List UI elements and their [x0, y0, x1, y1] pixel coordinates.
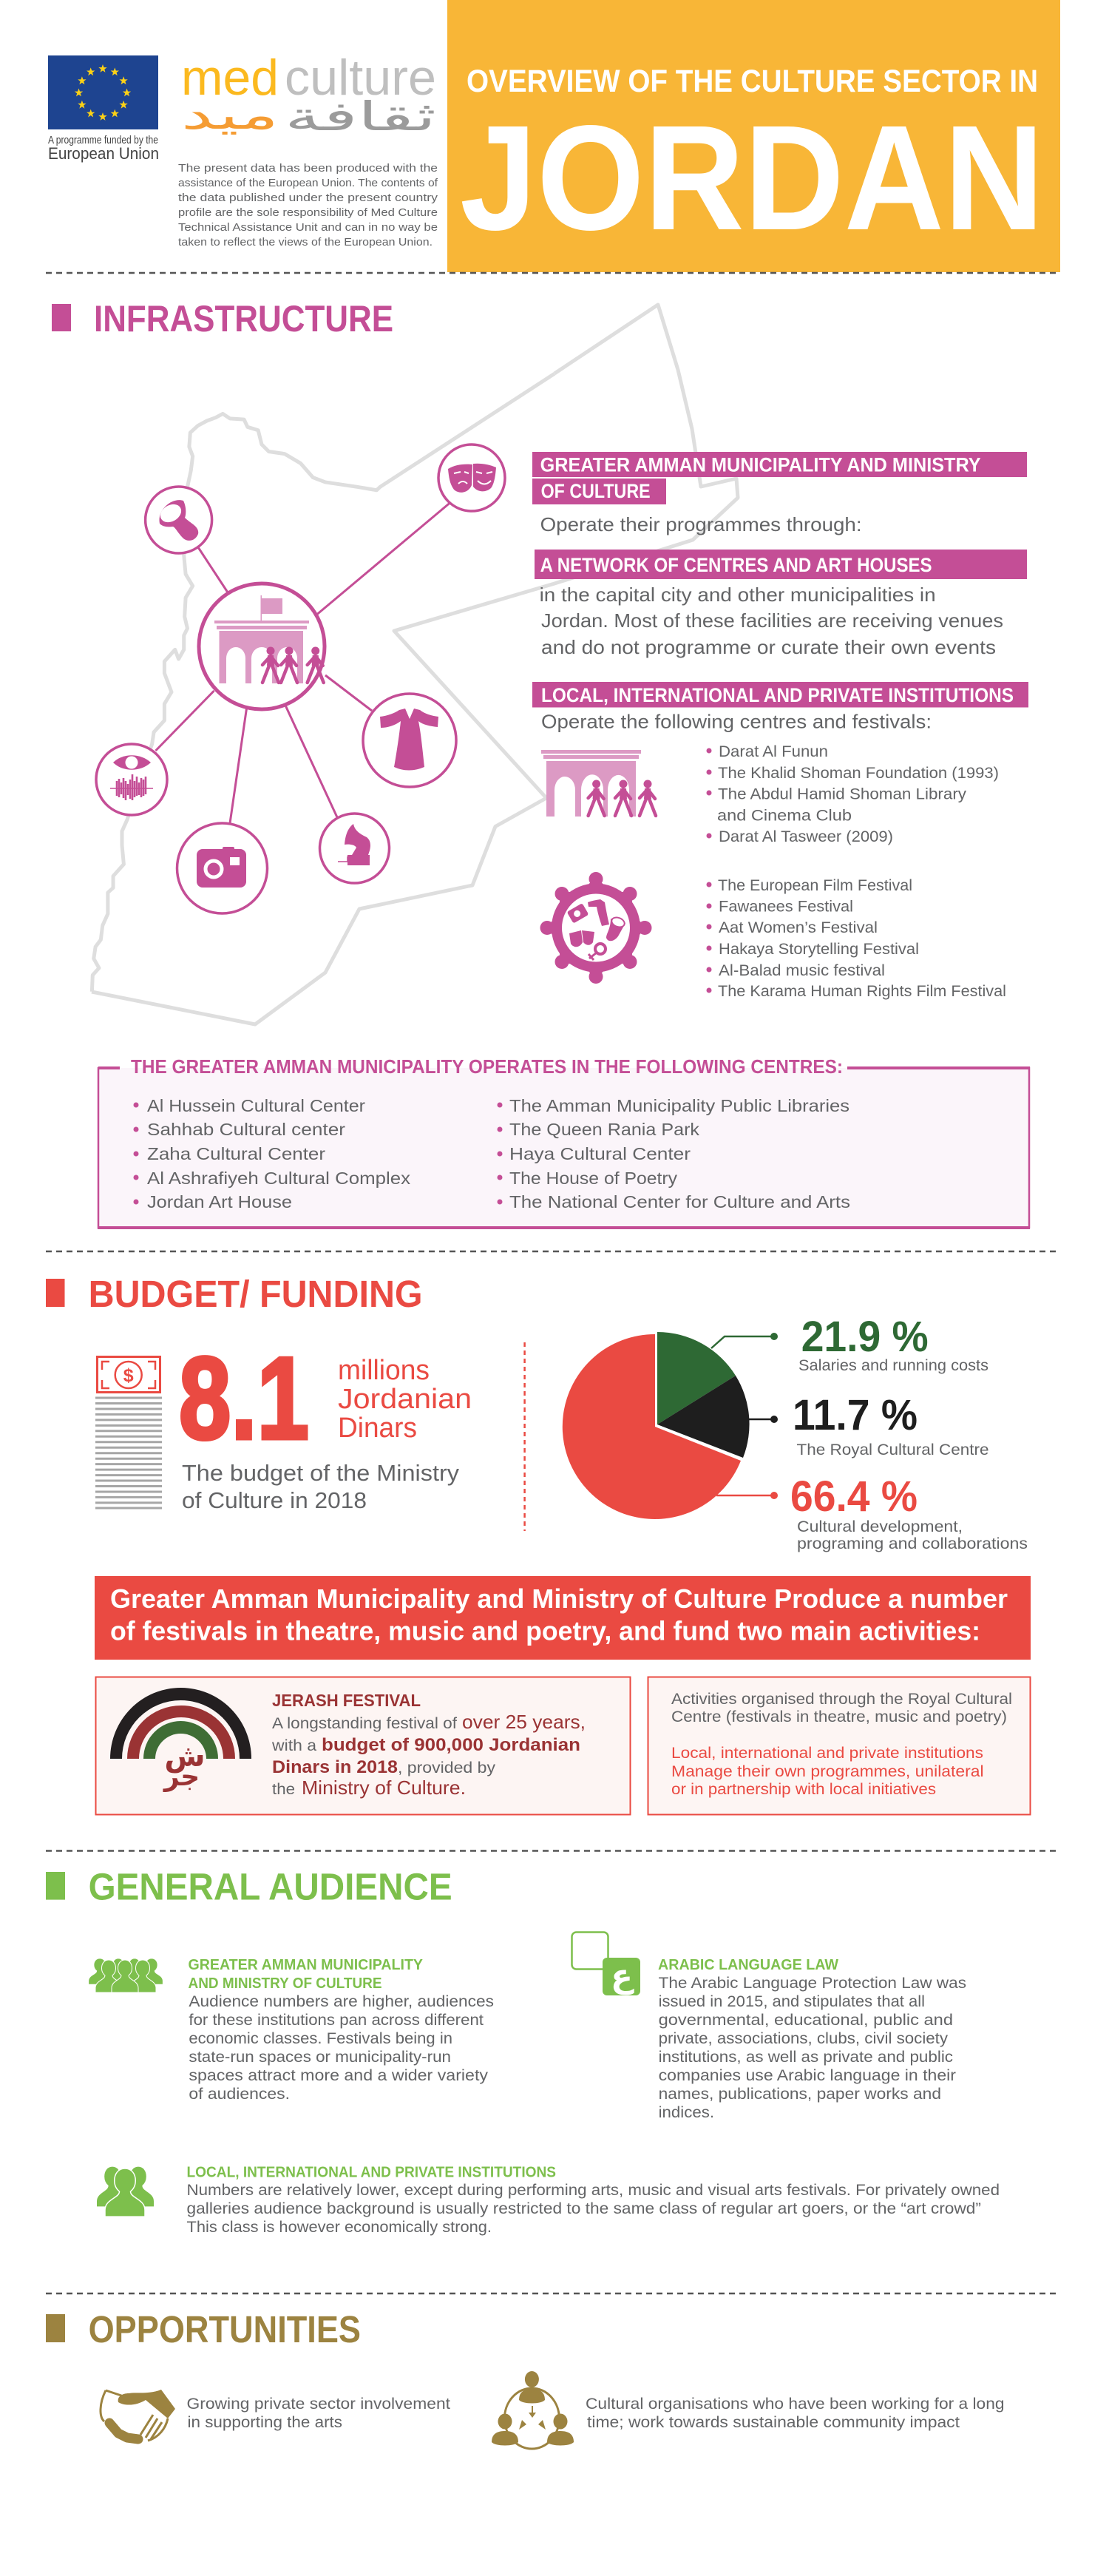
text: network description: and do not programme or curate their own events [541, 636, 996, 658]
text: millions Jordanian Dinars: millions [338, 1355, 430, 1386]
text: budget description: of Culture in 2018 [182, 1487, 367, 1513]
text: budget description [182, 1460, 460, 1513]
text: budget description: The budget of the Ministry [182, 1460, 460, 1486]
disclaimer text: The present data has been produced with the [178, 162, 438, 175]
text: activities [671, 1691, 1012, 1725]
label bar: municipality and ministry: OF CULTURE [541, 480, 651, 502]
pie chart: budget split [563, 1332, 750, 1519]
icon: handshake [101, 2390, 175, 2441]
stat: 66.4 percent [790, 1473, 1028, 1552]
text: local institutions audience: galleries audience background is usually restricted to the same class of regular art goers, or the “art crowd” [186, 2200, 981, 2217]
panel: Jerash festival [96, 1677, 630, 1815]
Med Culture logo: culture [285, 50, 436, 106]
icon: camera [177, 823, 268, 913]
banner: festivals and activities [95, 1576, 1031, 1660]
text: local institutions: Manage their own programmes, unilateral [671, 1763, 984, 1780]
list: centres right column: The Amman Municipality Public Libraries [509, 1096, 849, 1115]
icon: Jerash festival logo: ش [164, 1740, 206, 1774]
text: municipality audience: for these institutions pan across different [189, 2012, 484, 2029]
text: municipality audience: economic classes. Festivals being in [189, 2030, 452, 2047]
icon: drum [146, 487, 212, 553]
text: municipality audience: state-run spaces or municipality-run [189, 2049, 451, 2066]
icon: money stack: $ [123, 1365, 134, 1386]
text: millions Jordanian Dinars: Dinars [338, 1413, 417, 1444]
text: Jerash description [271, 1711, 586, 1799]
text: Jerash description: with a [271, 1737, 316, 1754]
disclaimer text: profile are the sole responsibility of Med Culture [178, 206, 438, 219]
text: Jerash description: budget of 900,000 Jordanian [322, 1735, 580, 1755]
text: Jerash description: over 25 years, [462, 1711, 586, 1733]
text: Arabic language law: governmental, educational, public and [659, 2012, 953, 2029]
text: private sector: Growing private sector involvement [186, 2396, 450, 2413]
Med Culture logo: ثقافة [285, 93, 436, 140]
list: centres left column: Sahhab Cultural center [147, 1120, 345, 1139]
stat: 66.4 percent: programing and collaborations [797, 1535, 1028, 1552]
list: centres left column: Zaha Cultural Center [147, 1144, 325, 1163]
list: festivals: Fawanees Festival [719, 898, 853, 916]
text: network description: Jordan. Most of these facilities are receiving venues [541, 609, 1003, 632]
list: centres: The Abdul Hamid Shoman Library [718, 785, 967, 803]
stat: 11.7 percent: 11.7 % [793, 1391, 918, 1439]
list: festivals: Hakaya Storytelling Festival [719, 941, 919, 958]
panel: header [48, 0, 1060, 272]
text: network description: in the capital city and other municipalities in [540, 584, 936, 606]
text: Arabic language law: indices. [659, 2104, 714, 2121]
icon: traditional dress [363, 694, 456, 787]
list: centres left column: Al Hussein Cultural Center [147, 1096, 365, 1115]
icon: community circle [492, 2371, 574, 2449]
text: activities: Activities organised through the Royal Cultural [671, 1691, 1012, 1708]
list: festivals: Aat Women’s Festival [719, 919, 878, 936]
text: municipality audience: Audience numbers are higher, audiences [189, 1993, 494, 2010]
text: municipality audience: of audiences. [189, 2086, 290, 2103]
heading: centres: THE GREATER AMMAN MUNICIPALITY OPERATES IN THE FOLLOWING CENTRES: [131, 1055, 843, 1078]
stat: 66.4 percent: 66.4 % [790, 1473, 918, 1521]
list: centres: and Cinema Club [717, 808, 852, 825]
title block [447, 0, 1060, 272]
icon: gramophone [319, 814, 389, 883]
text: operate programmes: Operate their programmes through: [540, 513, 862, 535]
icon: money stack [95, 1356, 162, 1508]
text: Arabic language law: issued in 2015, and stipulates that all [659, 1993, 925, 2010]
stat: 11.7 percent: The Royal Cultural Centre [797, 1441, 989, 1458]
panel: general audience [46, 1866, 1000, 2236]
title block: JORDAN [460, 94, 1044, 261]
text: Arabic language law [658, 1957, 966, 2121]
list: centres [707, 743, 999, 845]
text: Jerash description: the [272, 1781, 295, 1798]
list: centres right column [497, 1096, 850, 1211]
text: local institutions audience: LOCAL, INTERNATIONAL AND PRIVATE INSTITUTIONS [186, 2165, 556, 2181]
list: centres right column: The Queen Rania Park [509, 1120, 700, 1139]
EU funding caption: European Union [48, 144, 159, 163]
text: local institutions audience: This class is however economically strong. [186, 2219, 492, 2236]
list: centres left column: Al Ashrafiyeh Cultural Complex [147, 1169, 411, 1188]
text: Jerash description: Ministry of Culture. [302, 1777, 466, 1799]
EU funding caption [48, 134, 159, 163]
text: municipality audience: AND MINISTRY OF CULTURE [188, 1975, 381, 1992]
panel: infrastructure [52, 298, 1030, 1228]
text: local institutions: Local, international and private institutions [671, 1745, 983, 1762]
disclaimer text: assistance of the European Union. The contents of [178, 177, 438, 189]
icon: Arabic language speech bubbles: ع [611, 1958, 634, 1995]
text: Jerash description: Dinars in 2018 [272, 1757, 398, 1777]
label bar: network of centres [535, 550, 1027, 579]
disclaimer text: taken to reflect the views of the European Union. [178, 236, 433, 249]
icon: theatre masks [438, 444, 505, 511]
label bar: local international private: LOCAL, INTERNATIONAL AND PRIVATE INSTITUTIONS [541, 684, 1014, 706]
list: centres right column: Haya Cultural Center [509, 1144, 691, 1163]
list: centres: Darat Al Tasweer (2009) [719, 828, 893, 845]
EU funding caption: A programme funded by the [48, 134, 158, 146]
text: activities: Centre (festivals in theatre, music and poetry) [671, 1708, 1007, 1725]
Med Culture logo [181, 50, 436, 140]
heading: opportunities: OPPORTUNITIES [89, 2308, 361, 2350]
Med Culture logo: ميد [181, 92, 279, 138]
network connector lines [155, 504, 450, 823]
icon: Jerash festival logo [110, 1688, 251, 1792]
list: centres left column [133, 1096, 411, 1211]
text: Jerash description: , provided by [398, 1759, 496, 1777]
EU flag [48, 55, 158, 129]
label bar: municipality and ministry [532, 452, 1027, 504]
text: cultural organisations: Cultural organisations who have been working for a long [586, 2396, 1004, 2413]
heading: infrastructure: INFRASTRUCTURE [94, 298, 393, 339]
disclaimer text: the data published under the present country [178, 192, 438, 204]
text: local institutions audience: Numbers are relatively lower, except during performing arts, music and visual arts festivals. For privately owned [186, 2182, 1000, 2199]
text: local institutions [671, 1745, 984, 1798]
stat: 66.4 percent: Cultural development, [797, 1518, 963, 1535]
text: operate centres: Operate the following centres and festivals: [541, 710, 932, 732]
list: festivals: The Karama Human Rights Film Festival [718, 983, 1006, 1000]
stat: 21.9 percent: Salaries and running costs [798, 1357, 988, 1374]
list: festivals: Al-Balad music festival [719, 962, 885, 979]
icon: eye and sound wave [96, 744, 167, 815]
text: local institutions: or in partnership with local initiatives [671, 1781, 936, 1798]
text: Arabic language law: private, associations, clubs, civil society [659, 2030, 949, 2047]
text: Arabic language law: ARABIC LANGUAGE LAW [658, 1957, 838, 1973]
heading: budget: BUDGET/ FUNDING [89, 1273, 423, 1315]
panel: Royal Cultural Centre activities [648, 1677, 1031, 1815]
stat: 11.7 percent [793, 1391, 989, 1458]
stat: 21.9 percent: 21.9 % [801, 1313, 929, 1361]
text: millions Jordanian Dinars [338, 1355, 472, 1444]
icon: audience crowd [89, 1958, 163, 1992]
label bar: network of centres: A NETWORK OF CENTRES AND ART HOUSES [540, 554, 932, 576]
stat: 21.9 percent [798, 1313, 988, 1374]
disclaimer text [178, 162, 438, 249]
disclaimer text: Technical Assistance Unit and can in no way be [178, 221, 438, 234]
text: private sector [186, 2396, 450, 2431]
banner: festivals and activities: Greater Amman Municipality and Ministry of Culture Produce a number [110, 1583, 1008, 1614]
text: cultural organisations [586, 2396, 1004, 2431]
text: Arabic language law: The Arabic Language Protection Law was [659, 1975, 966, 1992]
panel: governance text [532, 452, 1028, 1000]
list: centres: Darat Al Funun [719, 743, 828, 760]
map of Jordan outline [92, 305, 738, 1024]
text: network description [540, 584, 1003, 658]
text: local institutions audience [186, 2165, 1000, 2236]
text: municipality audience [188, 1957, 494, 2103]
label bar: municipality and ministry: GREATER AMMAN MUNICIPALITY AND MINISTRY [540, 454, 981, 476]
list: centres: The Khalid Shoman Foundation (1993) [718, 765, 999, 782]
text: municipality audience: GREATER AMMAN MUNICIPALITY [188, 1957, 424, 1973]
list: centres left column: Jordan Art House [147, 1192, 292, 1211]
icon: Jerash festival logo: جر [163, 1762, 200, 1792]
text: municipality audience: spaces attract more and a wider variety [189, 2067, 489, 2084]
list: centres right column: The House of Poetry [509, 1169, 678, 1188]
list: festivals: The European Film Festival [718, 877, 912, 894]
text: Arabic language law: names, publications, paper works and [659, 2086, 941, 2103]
text: Jerash description: A longstanding festival of [272, 1715, 457, 1732]
panel: opportunities [46, 2308, 1004, 2449]
panel: budget and funding [46, 1273, 1031, 1815]
Med Culture logo: med [181, 50, 279, 106]
icon: cultural centre hub [199, 584, 325, 709]
title block: OVERVIEW OF THE CULTURE SECTOR IN [467, 64, 1038, 99]
text: millions Jordanian Dinars: Jordanian [338, 1384, 472, 1415]
leader lines [711, 1333, 778, 1499]
stat: 8.1: 8.1 [179, 1333, 309, 1464]
panel: Greater Amman Municipality centres [98, 1055, 1030, 1228]
text: Arabic language law: institutions, as well as private and public [659, 2049, 953, 2066]
list: festivals [707, 877, 1006, 1000]
text: private sector: in supporting the arts [188, 2414, 342, 2431]
icon: festivals wreath [540, 872, 652, 984]
banner: festivals and activities: of festivals in theatre, music and poetry, and fund two main activities: [110, 1616, 980, 1646]
text: Jerash heading: JERASH FESTIVAL [272, 1691, 421, 1710]
list: centres right column: The National Center for Culture and Arts [509, 1192, 850, 1211]
heading: general audience: GENERAL AUDIENCE [89, 1866, 452, 1908]
text: Arabic language law: companies use Arabic language in their [659, 2067, 956, 2084]
icon: Arabic language speech bubbles [572, 1932, 640, 1995]
icon: building with walkers [541, 750, 656, 817]
text: cultural organisations: time; work towards sustainable community impact [587, 2414, 960, 2431]
icon: small audience group [96, 2166, 155, 2217]
